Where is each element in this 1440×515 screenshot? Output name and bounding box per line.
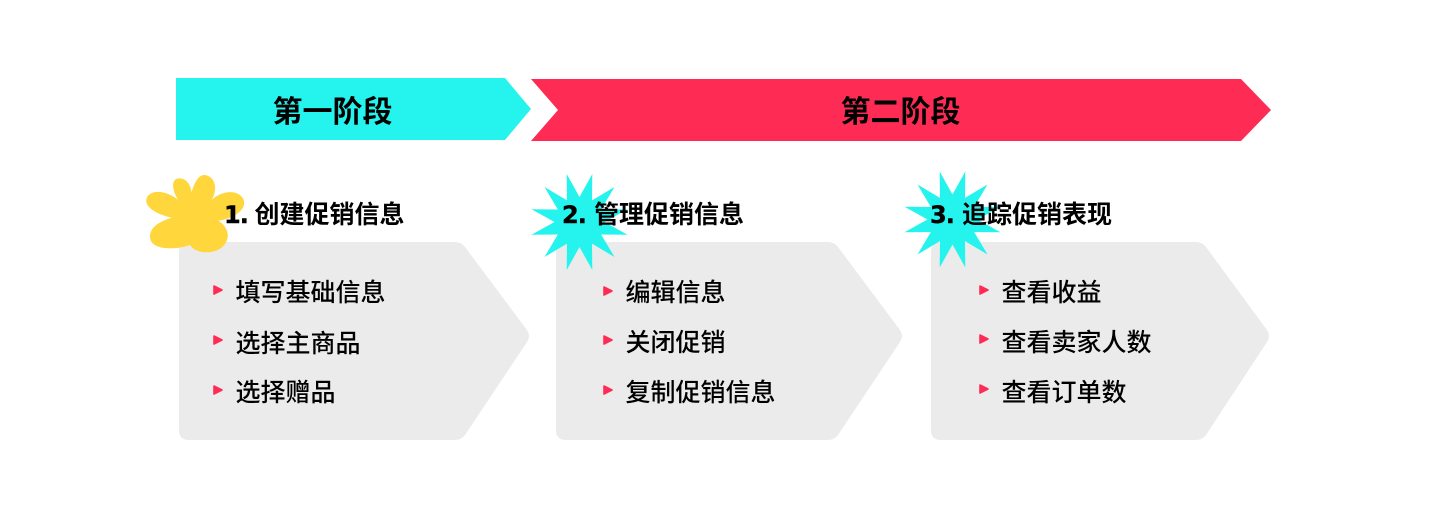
phase 1 banner: 第一阶段 <box>272 96 392 129</box>
panel: step 2 card <box>556 242 902 440</box>
heading: step 3: 追踪促销表现 <box>962 201 1112 229</box>
icon: bullet <box>214 386 222 394</box>
item text: 编辑信息 <box>626 279 726 307</box>
icon: bullet <box>980 335 988 343</box>
icon: cyan starburst 2 <box>532 174 628 270</box>
heading: step 1: 1. <box>224 201 248 229</box>
item text: 复制促销信息 <box>626 379 776 407</box>
icon: bullet <box>604 336 612 344</box>
phase 1 banner <box>176 78 531 140</box>
icon: bullet <box>604 386 612 394</box>
icon: bullet <box>214 336 222 344</box>
icon: yellow flower <box>146 175 244 252</box>
icon: bullet <box>980 286 988 294</box>
icon: bullet <box>604 287 612 295</box>
item text: 关闭促销 <box>626 329 726 357</box>
icon: cyan starburst 3 <box>904 172 1000 268</box>
icon: bullet <box>980 385 988 393</box>
heading: step 2: 2. <box>562 201 586 229</box>
item text: 查看订单数 <box>1002 379 1127 407</box>
item text: 选择主商品 <box>236 330 361 358</box>
item text: 选择赠品 <box>236 379 336 407</box>
heading: step 3: 3. <box>930 201 954 229</box>
item text: 查看卖家人数 <box>1002 329 1152 357</box>
item text: 填写基础信息 <box>236 279 386 307</box>
panel: step 1 card <box>179 242 529 440</box>
phase 2 banner <box>531 79 1271 141</box>
phase 2 banner: 第二阶段 <box>840 96 960 129</box>
panel: step 3 card <box>931 242 1269 440</box>
item text: 查看收益 <box>1002 279 1102 307</box>
heading: step 2: 管理促销信息 <box>594 201 744 229</box>
icon: bullet <box>214 286 222 294</box>
heading: step 1: 创建促销信息 <box>254 201 405 229</box>
